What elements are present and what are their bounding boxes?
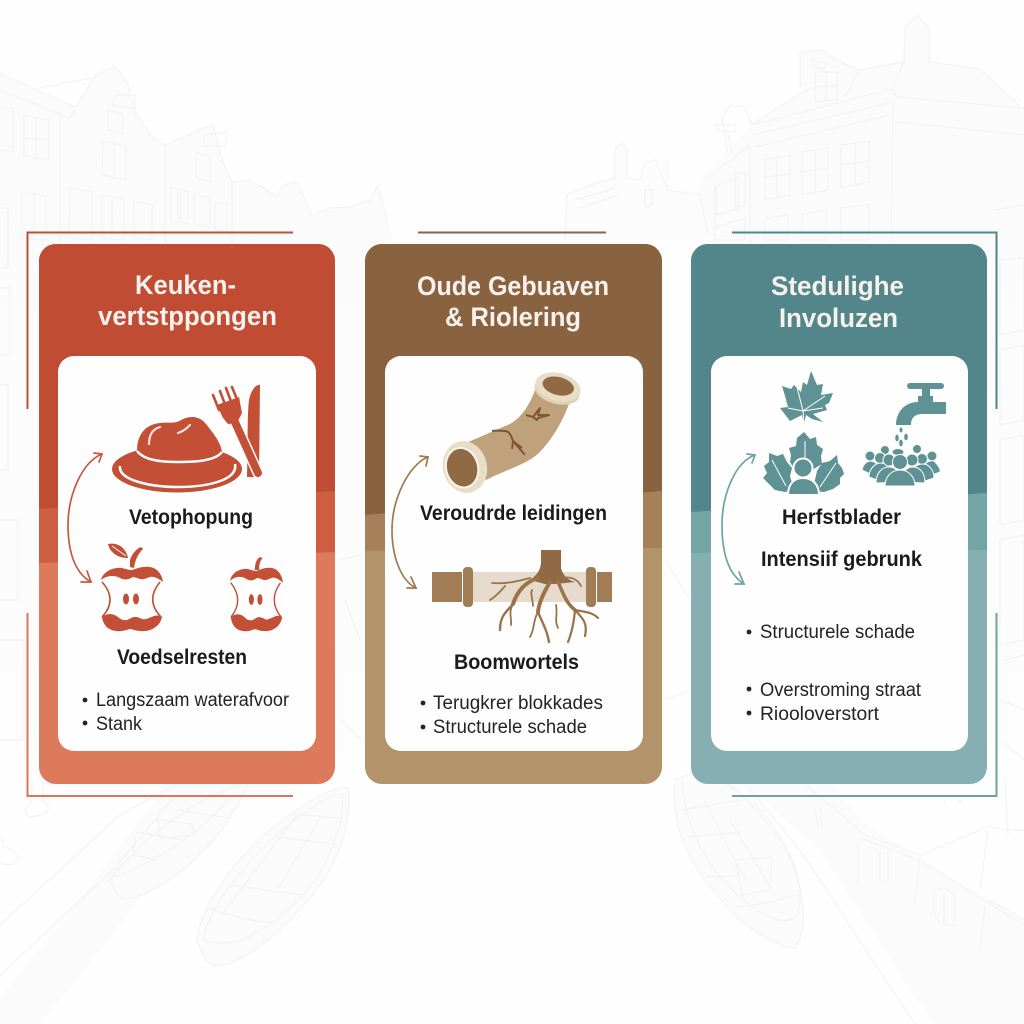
icon: dripping tap	[895, 383, 946, 446]
icon: pipe with tree roots	[432, 550, 612, 642]
label: Intensiif gebrunk: Intensiif gebrunk	[761, 548, 922, 571]
arrow: cycle between plate and apple	[68, 453, 102, 582]
icon: maple leaf	[780, 371, 833, 424]
label: Voedselresten: Voedselresten	[117, 646, 247, 669]
corner bracket: card 3 top	[732, 232, 996, 409]
bullet list card 2: Terugkrer blokkades	[433, 693, 603, 714]
corner bracket: card 1 bottom	[28, 613, 293, 796]
card 1 heading	[98, 270, 277, 331]
bullet list card 3	[747, 622, 922, 725]
label: Herfstblader: Herfstblader	[782, 506, 901, 529]
corner bracket: card 1 top	[28, 232, 293, 409]
card 2 heading: Oude Gebuaven	[417, 271, 609, 301]
card 1 coloured background	[39, 244, 335, 784]
panel: Oude Gebouwen & Riolering	[365, 244, 662, 784]
label: Veroudrde leidingen: Veroudrde leidingen	[420, 502, 607, 525]
top rule: card 2	[418, 232, 606, 234]
icon: crowd	[862, 444, 940, 486]
card 1 heading: Keuken-	[135, 270, 236, 300]
icon: apple core large	[101, 544, 163, 631]
card 2 coloured background	[365, 244, 662, 784]
icon: apple core small	[230, 557, 283, 631]
card 3 heading: Stedulighe	[771, 271, 904, 301]
label: Vetophopung: Vetophopung	[129, 506, 253, 529]
card 1 heading: vertstppongen	[98, 301, 277, 331]
bullet list card 2: Structurele schade	[433, 717, 587, 738]
panel: Keukenverstoppingen	[39, 244, 335, 784]
card 2 heading: & Riolering	[445, 302, 581, 332]
icon: fork and knife	[213, 385, 260, 477]
card 2 white inner panel	[385, 356, 643, 751]
bullet list card 1: Langszaam waterafvoor	[96, 690, 290, 711]
icon: autumn leaves with person	[763, 432, 844, 495]
card 3 coloured background	[691, 244, 987, 784]
icon: cracked old pipe	[437, 368, 584, 498]
bullet list card 1	[83, 690, 290, 735]
label: Boomwortels: Boomwortels	[454, 651, 579, 674]
card 3 heading: Involuzen	[779, 303, 898, 333]
bullet list card 1: Stank	[96, 714, 142, 735]
card 1 white inner panel	[58, 356, 316, 751]
arrow: cycle between pipe and roots	[392, 456, 428, 588]
card 3 heading	[771, 271, 904, 333]
bullet list card 3: Riooloverstort	[760, 704, 880, 725]
bullet list card 3: Structurele schade	[760, 622, 915, 643]
bullet list card 3: Overstroming straat	[760, 680, 922, 701]
panel: Stedelijke Invloeden	[691, 244, 987, 784]
arrow: cycle between icons	[722, 454, 755, 584]
bullet list card 2	[421, 693, 603, 738]
card 3 white inner panel	[711, 356, 968, 751]
icon: plate with fat	[112, 417, 242, 492]
card 2 heading	[417, 271, 609, 332]
corner bracket: card 3 bottom	[732, 613, 996, 796]
